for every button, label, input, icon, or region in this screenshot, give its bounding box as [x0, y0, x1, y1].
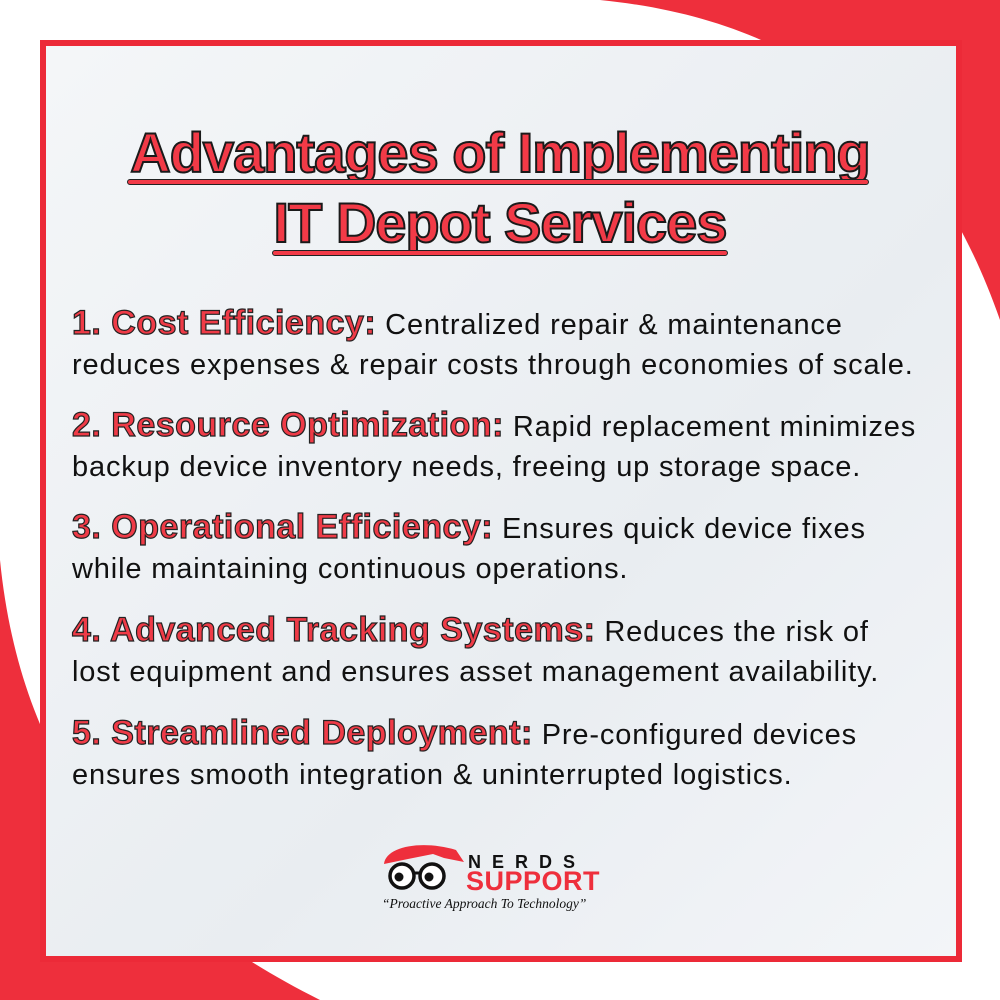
logo: [382, 845, 600, 911]
title: [127, 121, 870, 256]
item 1: reduces expenses & repair costs through economies of scale.: [72, 349, 914, 381]
logo: “Proactive Approach To Technology”: [382, 896, 586, 911]
title: IT Depot Services: [274, 191, 726, 254]
item 4: 4. Advanced Tracking Systems: Reduces the risk of: [72, 611, 869, 649]
item 3: [72, 508, 866, 585]
item 4: [72, 611, 879, 688]
item 5: ensures smooth integration & uninterrupted logistics.: [72, 759, 792, 791]
item 2: [72, 406, 916, 483]
item 1: 1. Cost Efficiency: Centralized repair & maintenance: [72, 304, 843, 342]
item 5: [72, 714, 857, 791]
item 1: [72, 304, 914, 381]
item 5: 5. Streamlined Deployment: Pre-configured devices: [72, 714, 857, 752]
item 2: backup device inventory needs, freeing up storage space.: [72, 451, 861, 483]
logo: NERDS: [468, 852, 586, 872]
logo: SUPPORT: [466, 866, 600, 896]
icon: nerd glasses: [384, 845, 464, 890]
item 4: lost equipment and ensures asset management availability.: [72, 656, 879, 688]
item 3: 3. Operational Efficiency: Ensures quick device fixes: [72, 508, 866, 546]
title: Advantages of Implementing: [130, 121, 870, 184]
item 3: while maintaining continuous operations.: [72, 553, 628, 585]
item 2: 2. Resource Optimization: Rapid replacement minimizes: [72, 406, 916, 444]
